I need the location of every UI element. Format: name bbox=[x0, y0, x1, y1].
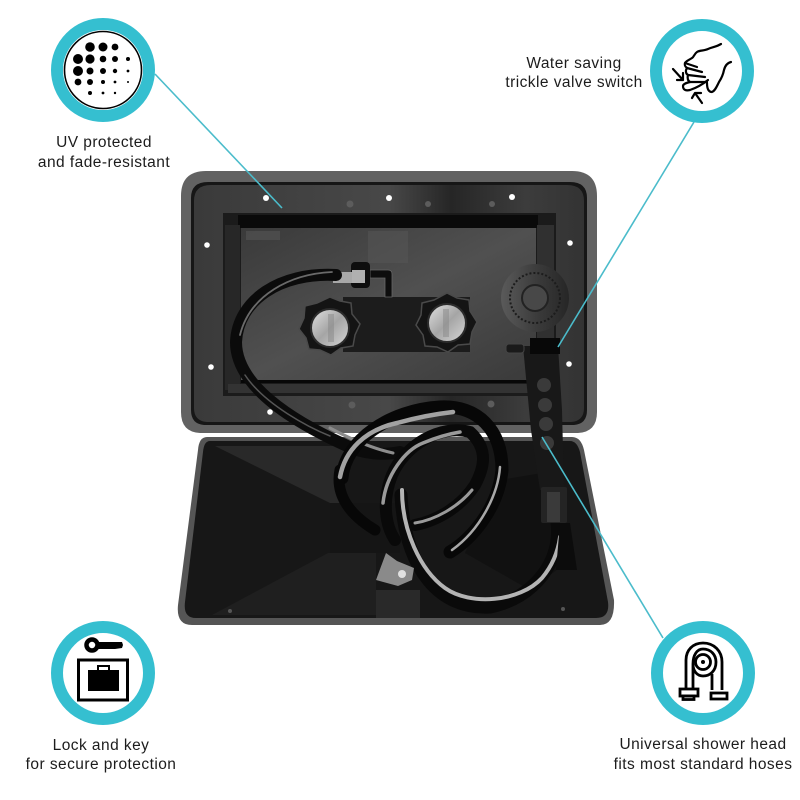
box door bbox=[178, 437, 614, 625]
callout: lock and key bbox=[26, 627, 176, 773]
box frame bbox=[181, 171, 597, 433]
icon: hand pressing switch bbox=[656, 25, 748, 117]
label: universal shower head: Universal shower head bbox=[619, 736, 787, 753]
frame screw holes bbox=[204, 194, 573, 415]
label: fits standard hoses: fits most standard hoses bbox=[614, 756, 792, 773]
hose bbox=[236, 272, 560, 607]
label: UV protected: UV protected bbox=[56, 134, 152, 151]
label: water saving: Water saving bbox=[526, 55, 622, 72]
connector line: trickle valve bbox=[558, 122, 694, 347]
label: trickle valve switch: trickle valve switch bbox=[505, 74, 643, 91]
label: secure protection: for secure protection bbox=[26, 756, 176, 773]
icon: key and case bbox=[57, 627, 149, 719]
label: fade-resistant: and fade-resistant bbox=[38, 154, 170, 171]
shower head handle bbox=[501, 264, 577, 570]
label: lock and key: Lock and key bbox=[53, 737, 149, 754]
callout: water saving bbox=[505, 25, 748, 117]
product: shower box bbox=[178, 171, 614, 625]
icon: coiled hose bbox=[657, 627, 749, 719]
box recess bbox=[223, 213, 556, 396]
connector line: hose bbox=[542, 437, 663, 638]
callout: universal shower head bbox=[614, 627, 792, 773]
icon: UV dots bbox=[57, 24, 149, 116]
hose connector bbox=[376, 553, 414, 586]
connector line: UV bbox=[155, 74, 282, 208]
callout: UV protected bbox=[38, 24, 170, 171]
faucet valves bbox=[299, 262, 477, 355]
